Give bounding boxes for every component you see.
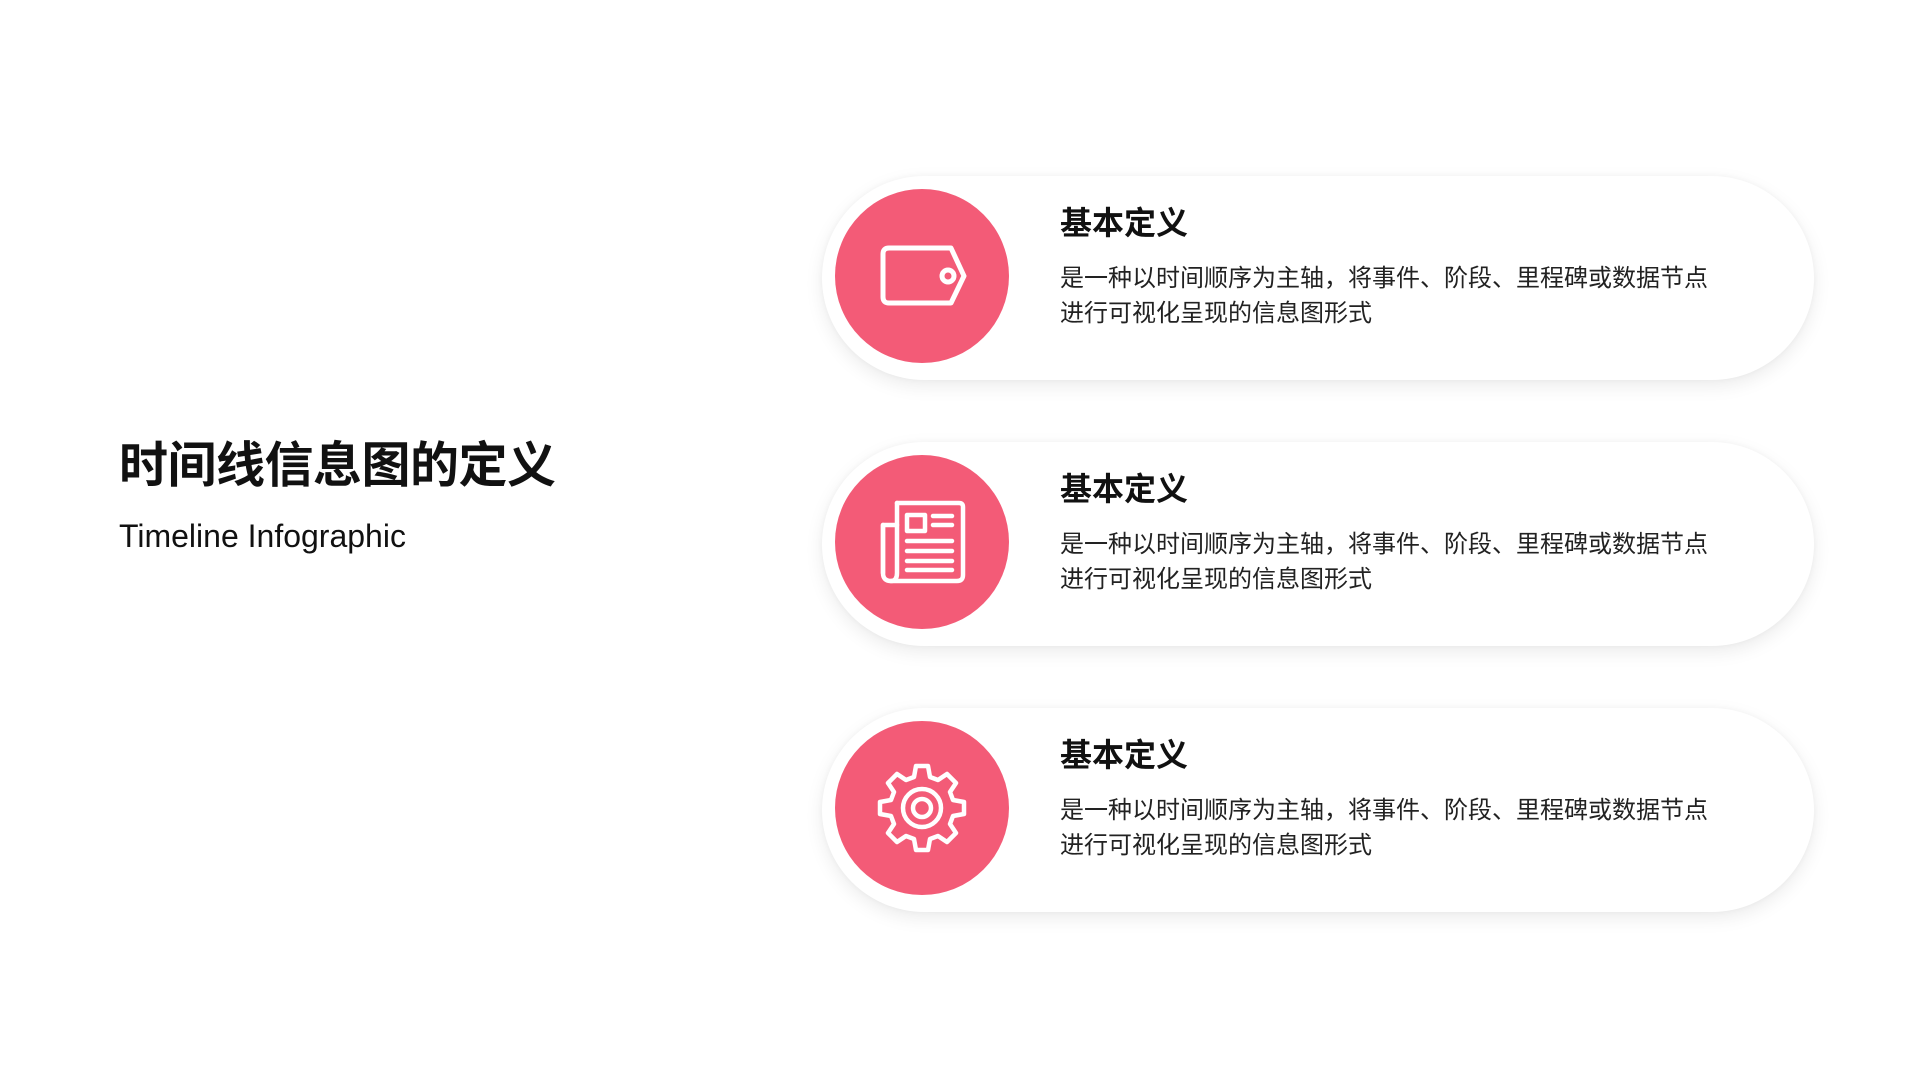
subtitle: Timeline Infographic bbox=[119, 518, 406, 554]
panel: card 2 bbox=[822, 442, 1814, 646]
text bbox=[1060, 265, 1708, 327]
panel: card 1 bbox=[822, 176, 1814, 380]
text: 进行可视化呈现的信息图形式 bbox=[1060, 566, 1372, 593]
text: 是一种以时间顺序为主轴，将事件、阶段、里程碑或数据节点 bbox=[1060, 265, 1708, 292]
icon: tag bbox=[835, 189, 1009, 363]
icon: newspaper bbox=[835, 455, 1009, 629]
panel: card 3 bbox=[822, 708, 1814, 912]
text: 是一种以时间顺序为主轴，将事件、阶段、里程碑或数据节点 bbox=[1060, 797, 1708, 824]
text bbox=[1060, 531, 1708, 593]
text: 是一种以时间顺序为主轴，将事件、阶段、里程碑或数据节点 bbox=[1060, 531, 1708, 558]
icon: gear bbox=[835, 721, 1009, 895]
text: 进行可视化呈现的信息图形式 bbox=[1060, 300, 1372, 327]
heading: 基本定义 bbox=[1060, 737, 1188, 773]
heading: 基本定义 bbox=[1060, 205, 1188, 241]
heading: 基本定义 bbox=[1060, 471, 1188, 507]
text bbox=[1060, 797, 1708, 859]
text: 进行可视化呈现的信息图形式 bbox=[1060, 832, 1372, 859]
title: 时间线信息图的定义 bbox=[119, 439, 556, 493]
